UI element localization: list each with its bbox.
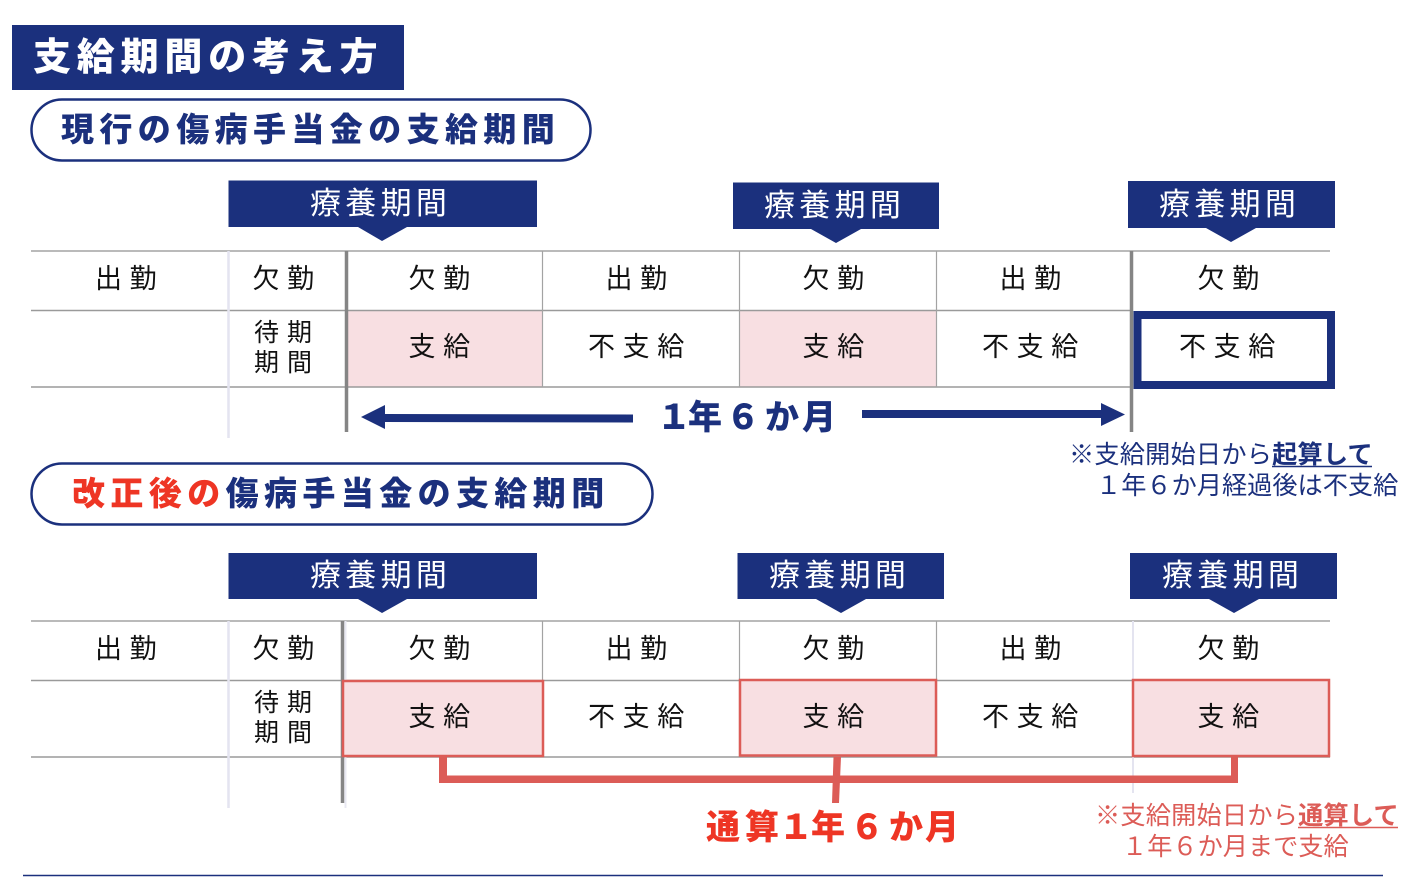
note: current system: ※支給開始日から起算して — [1069, 441, 1373, 469]
paid cell 2 — [740, 680, 936, 756]
table: current system schedule: 欠勤 — [252, 264, 322, 294]
paid cell 3: 支給 — [1198, 702, 1267, 732]
table: revised system schedule: 欠勤 — [802, 634, 872, 664]
table: revised system schedule: 出勤 — [95, 634, 164, 664]
table: revised system schedule: 出勤 — [1000, 634, 1069, 664]
callout: recuperation period 2: 療養期間 — [764, 188, 905, 223]
table: revised system schedule: 不支給 — [982, 702, 1086, 732]
table: revised system schedule: 欠勤 — [252, 634, 322, 664]
note: current system — [1069, 441, 1398, 500]
label: one year six months: １年６か月 — [657, 399, 836, 437]
panel: revised system — [31, 464, 1399, 861]
callout: recuperation period 3: 療養期間 — [1159, 187, 1300, 222]
table: current system schedule: 欠勤 — [408, 264, 478, 294]
table: current system schedule: 出勤 — [606, 264, 675, 294]
table: revised system schedule: 待期 — [254, 689, 320, 717]
table: revised system schedule: 欠勤 — [1198, 634, 1267, 664]
table: current system schedule: 期間 — [254, 349, 320, 377]
arrow: right — [862, 403, 1125, 426]
panel: current system — [31, 100, 1398, 500]
table: revised system schedule: 不支給 — [588, 702, 692, 732]
table: revised system schedule — [31, 621, 1330, 808]
table: current system schedule: 欠勤 — [802, 264, 872, 294]
callout: recuperation period 3: 療養期間 — [1162, 558, 1303, 593]
note: revised system — [1095, 802, 1399, 861]
paid cell 3 — [1133, 680, 1329, 756]
heading: current system: 現行の傷病手当金の支給期間 — [61, 111, 560, 148]
note: revised system: １年６か月まで支給 — [1122, 833, 1349, 861]
callout: recuperation period 1 — [228, 180, 537, 241]
table: current system schedule: 欠勤 — [1198, 264, 1267, 294]
paid cell 1: 支給 — [408, 702, 478, 732]
table: current system schedule: 不支給 — [982, 332, 1086, 362]
table: revised system schedule: 期間 — [254, 719, 320, 747]
heading: revised system — [32, 464, 652, 524]
paid cell 1 — [343, 681, 543, 756]
table: revised system schedule: 出勤 — [606, 634, 675, 664]
table: current system schedule: 支給 — [408, 332, 478, 362]
callout: recuperation period 1: 療養期間 — [310, 558, 451, 593]
title — [12, 25, 404, 90]
paid cell 2: 支給 — [802, 702, 872, 732]
callout: recuperation period 2 — [733, 182, 939, 243]
callout: recuperation period 3 — [1128, 181, 1335, 242]
note: current system: １年６か月経過後は不支給 — [1096, 472, 1398, 500]
arrow: left — [361, 405, 633, 429]
callout: recuperation period 1 — [228, 553, 537, 613]
table: current system schedule: 不支給 — [588, 332, 692, 362]
table: current system schedule: 出勤 — [1000, 264, 1069, 294]
heading: current system — [32, 100, 590, 160]
label: cumulative one year six months: 通算１年６か月 — [706, 808, 959, 847]
table: current system schedule: 待期 — [254, 319, 320, 347]
callout: recuperation period 2 — [738, 553, 944, 613]
table: current system schedule: 支給 — [802, 332, 872, 362]
callout: recuperation period 1: 療養期間 — [310, 186, 451, 221]
callout: recuperation period 2: 療養期間 — [769, 558, 910, 593]
highlighted cell: no payment after period: 不支給 — [1179, 332, 1283, 362]
note: revised system: ※支給開始日から通算して — [1095, 802, 1399, 830]
table: current system schedule: 出勤 — [95, 264, 164, 294]
callout: recuperation period 3 — [1130, 553, 1337, 613]
highlighted cell: no payment after period — [1138, 315, 1331, 385]
table: current system schedule — [31, 251, 1330, 438]
bracket: cumulative period — [439, 757, 1238, 803]
title: 支給期間の考え方 — [33, 37, 383, 79]
table: revised system schedule: 欠勤 — [408, 634, 478, 664]
heading: revised system: 改正後の傷病手当金の支給期間 — [72, 475, 610, 512]
